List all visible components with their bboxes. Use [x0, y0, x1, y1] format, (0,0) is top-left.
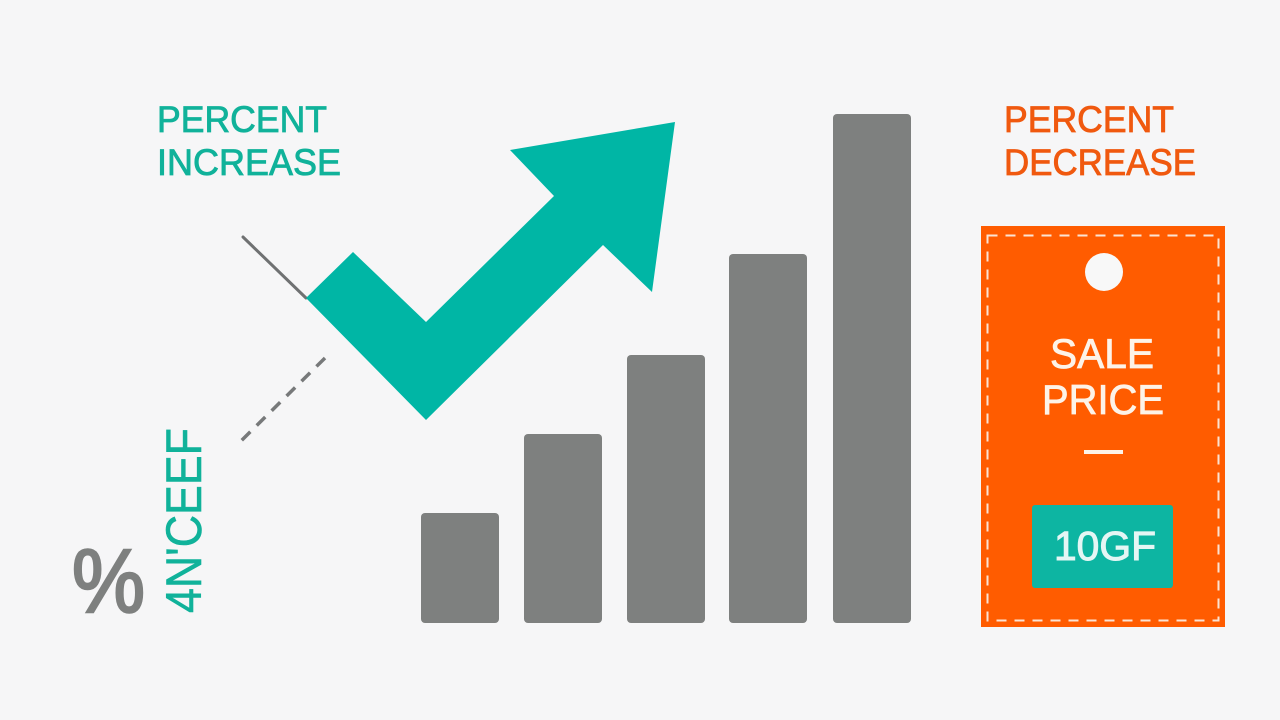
- tag hole: [1085, 253, 1123, 291]
- tag title: SALE: [1050, 330, 1154, 377]
- solid leader line: [243, 237, 306, 298]
- heading: percent decrease: PERCENT: [1004, 99, 1174, 140]
- price badge: 10GF: [1054, 523, 1156, 569]
- heading: percent increase: INCREASE: [157, 142, 341, 183]
- price badge: [1032, 505, 1173, 588]
- bar chart: [421, 114, 911, 623]
- heading: percent increase: [157, 99, 341, 183]
- tag title: PRICE: [1042, 376, 1164, 423]
- icon: rising zigzag arrow: [306, 122, 675, 420]
- dashed leader line: [241, 358, 325, 441]
- heading: percent increase: PERCENT: [157, 99, 327, 140]
- tag title: [1042, 330, 1164, 423]
- heading: percent decrease: [1004, 99, 1196, 183]
- rotated teal label: 4N'CEEF: [156, 428, 212, 613]
- tag stitching: [988, 236, 1218, 620]
- heading: percent decrease: DECREASE: [1004, 142, 1196, 183]
- tag divider: [1084, 450, 1123, 454]
- panel: sale price tag: [981, 226, 1225, 627]
- icon: percent sign: %: [72, 532, 145, 632]
- tag body: [981, 226, 1225, 627]
